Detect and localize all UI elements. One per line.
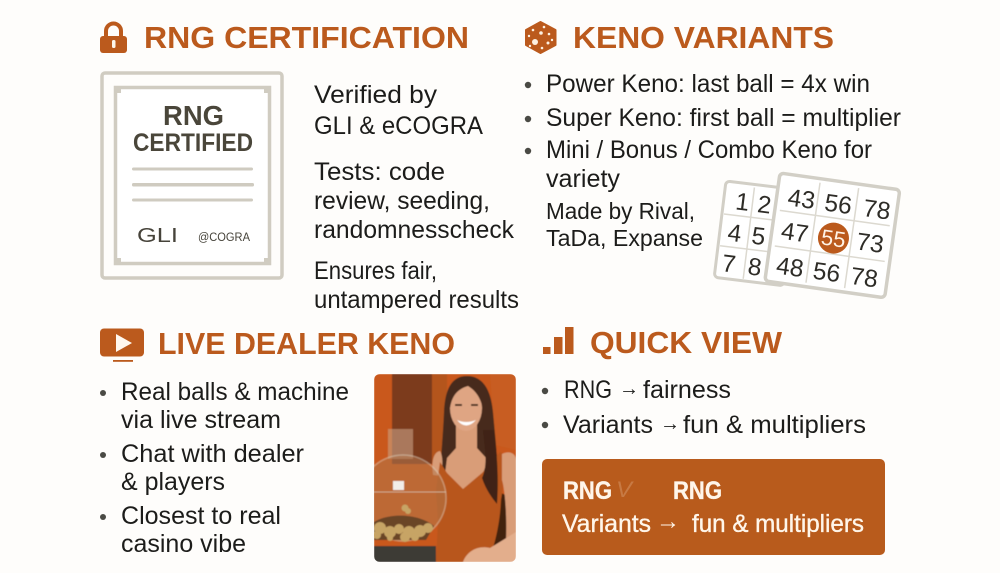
bullet list: quick view: → [660, 413, 680, 435]
icon: die [526, 22, 556, 53]
certificate illustration: GLI [137, 225, 178, 247]
heading: Keno variants: KENO VARIANTS [573, 20, 834, 55]
callout: summary box: → [656, 508, 680, 535]
bullet list: quick view: Variants [563, 411, 653, 439]
text block: makers: TaDa, Expanse [546, 225, 703, 251]
bullet list: quick view: fairness [643, 376, 731, 404]
callout: summary box [542, 459, 885, 555]
text block: makers: Made by Rival, [546, 198, 695, 224]
illustration: front keno ticket: 48 [775, 253, 805, 283]
right arm [502, 452, 516, 541]
text block: verified by [314, 81, 483, 140]
text block: tests: randomnesscheck [314, 216, 514, 244]
illustration: front keno ticket: 56 [811, 258, 842, 288]
text block: ensures fair [314, 257, 519, 314]
illustration: front keno ticket: 56 [823, 190, 854, 220]
bullet list: live dealer features: Chat with dealer [121, 440, 304, 468]
text block: verified by: Verified by [314, 81, 438, 109]
bullet list: live dealer features: Real balls & machine [121, 378, 349, 406]
certificate illustration [102, 73, 282, 278]
illustration: back keno ticket: 8 [746, 253, 763, 282]
bullet list: live dealer features: & players [121, 468, 225, 496]
text block: verified by: GLI & eCOGRA [314, 112, 483, 140]
hair back [440, 376, 498, 471]
bullet list: live dealer features: Closest to real [121, 502, 281, 530]
certificate illustration: @COGRA [198, 232, 250, 244]
bullet list: live dealer features [100, 378, 349, 558]
hair front strand [482, 444, 498, 504]
bullet list: variants: variety [546, 165, 620, 193]
bullet list: quick view: RNG [564, 376, 612, 404]
certificate illustration: CERTIFIED [133, 129, 253, 157]
forearm and hand [463, 532, 516, 562]
highlighted ball 55: 55 [820, 224, 847, 253]
icon: padlock [100, 24, 127, 53]
heading: Live dealer Keno: LIVE DEALER KENO [158, 326, 455, 361]
bullet list: variants: Mini / Bonus / Combo Keno for [546, 136, 872, 164]
illustration: back keno ticket: 4 [726, 220, 743, 248]
dark backdrop by right arm [493, 493, 507, 546]
bullet list: variants: Power Keno: last ball = 4x win [546, 70, 870, 98]
illustration: back keno ticket: 5 [750, 223, 767, 251]
illustration: back keno ticket: 2 [756, 191, 773, 220]
illustration: back keno ticket [714, 181, 795, 286]
certificate illustration: RNG [163, 100, 224, 131]
callout: summary box: fun & multipliers [692, 510, 864, 538]
illustration: front keno ticket [765, 173, 900, 298]
panel: RNG certification [100, 20, 519, 314]
ball machine [388, 429, 413, 459]
icon: video play [100, 328, 144, 362]
illustration: live dealer photo [360, 374, 516, 562]
heading: RNG certification: RNG CERTIFICATION [144, 20, 469, 55]
chest, neck and shoulders [445, 424, 488, 491]
bullet list: variants: Super Keno: first ball = multiplier [546, 104, 901, 132]
panel: Quick view [542, 325, 885, 555]
callout: summary box: Variants [562, 510, 651, 538]
illustration: front keno ticket: 73 [855, 228, 885, 259]
illustration: back keno ticket: 1 [734, 188, 751, 217]
text block: tests: review, seeding, [314, 187, 490, 215]
text block: ensures fair: Ensures fair, [314, 257, 437, 285]
dress [436, 452, 505, 562]
illustration: front keno ticket: 43 [786, 184, 817, 215]
bullet list: live dealer features: casino vibe [121, 530, 246, 558]
bullet list: quick view: fun & multipliers [683, 411, 866, 439]
illustration: front keno ticket: 47 [779, 218, 810, 248]
callout: summary box: RNG [563, 477, 612, 505]
callout: summary box: V [616, 477, 635, 502]
illustration: front keno ticket: 78 [849, 263, 880, 294]
illustration: back keno ticket: 7 [720, 250, 737, 279]
text block: tests: Tests: code [314, 158, 445, 186]
bullet list: variants [525, 70, 901, 193]
bullet list: quick view [542, 376, 866, 439]
face [450, 385, 482, 431]
panel: Live dealer Keno [100, 326, 516, 562]
bullet list: quick view: → [619, 378, 639, 400]
heading: Quick view: QUICK VIEW [590, 325, 783, 360]
text block: makers [546, 198, 703, 251]
icon: bar chart [543, 327, 574, 354]
panel: Keno variants [525, 20, 901, 298]
illustration: front keno ticket: 78 [861, 195, 892, 226]
callout: summary box: RNG [673, 477, 722, 505]
text block: ensures fair: untampered results [314, 286, 519, 314]
bullet list: live dealer features: via live stream [121, 406, 281, 434]
text block: tests [314, 158, 514, 244]
